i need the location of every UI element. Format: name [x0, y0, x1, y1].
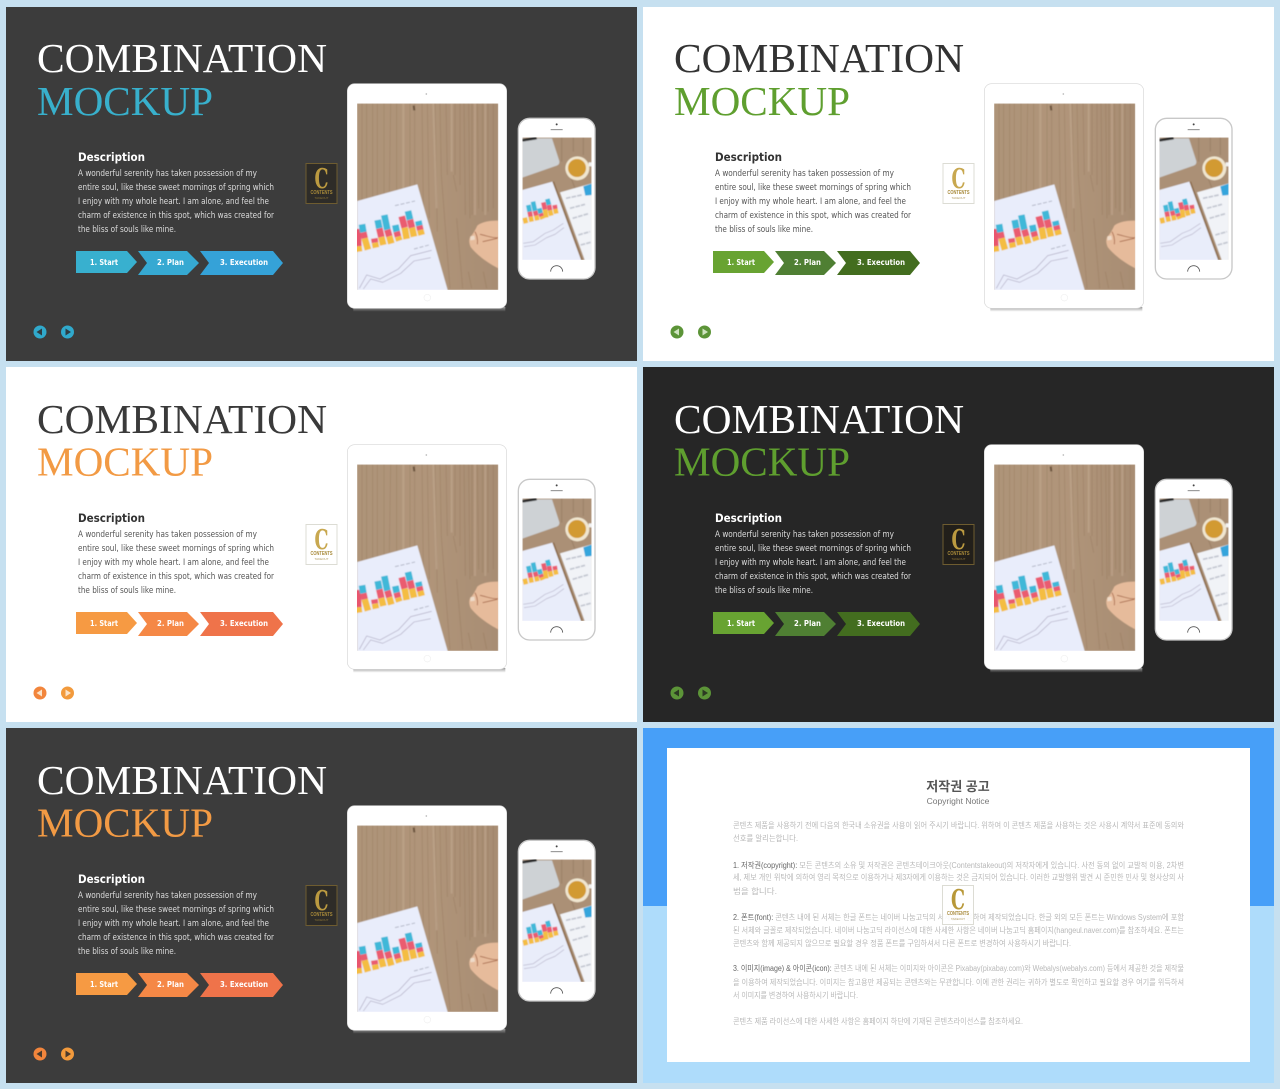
phone mockup: [1155, 479, 1232, 640]
logo badge: C: [952, 525, 966, 556]
notice body text: 2. 폰트(font): 콘텐츠 내에 된 서체는 한글 폰트는 네이버 나눔고딕의 서체를 사용하여 제작되었습니다. 한글 외의 모든 폰트는 Windows System에 포함: [733, 912, 1185, 922]
logo badge: [943, 164, 974, 204]
notice body text: 서 이미지를 변경하여 사용하시기 바랍니다.: [733, 990, 858, 1000]
tablet mockup: [984, 445, 1144, 673]
description text: [78, 511, 274, 596]
description text: Description: [78, 511, 145, 525]
title: MOCKUP: [37, 800, 213, 846]
logo badge: CONTENTS: [948, 551, 970, 557]
description text: charm of existence in this spot, which was created for: [715, 211, 911, 221]
description text: I enjoy with my whole heart. I am alone, and feel the: [715, 197, 906, 207]
process arrows: 1. Start: [727, 258, 755, 267]
notice heading: 저작권 공고: [926, 779, 990, 794]
notice body text: 세, 제보 개인 위탁에 의하여 영리 목적으로 이용하거나 제3자에게 이용하는 것은 금지되어 있습니다. 이러한 교발행위 발견 시 준민한 민사 및 형사상의 사: [733, 872, 1185, 882]
process arrows: 1. Start: [90, 980, 118, 989]
title: MOCKUP: [674, 78, 850, 124]
description text: A wonderful serenity has taken possession of my: [78, 530, 257, 540]
description text: the bliss of souls like mine.: [78, 947, 176, 957]
description text: Description: [715, 150, 782, 164]
logo badge: C: [952, 164, 966, 195]
description text: I enjoy with my whole heart. I am alone, and feel the: [715, 558, 906, 568]
phone mockup: [1155, 118, 1232, 279]
panel: white slide with orange accent: [6, 367, 637, 722]
process arrows: 3. Execution: [857, 619, 905, 628]
process arrows: 2. Plan: [794, 258, 821, 267]
description text: A wonderful serenity has taken possession of my: [715, 169, 894, 179]
panel: white slide with green accent: [643, 7, 1274, 361]
description text: the bliss of souls like mine.: [715, 225, 813, 235]
tablet mockup: [347, 84, 507, 312]
title: [37, 757, 327, 846]
notice body text: 콘텐츠와 함께 제공되지 않으므로 필요할 경우 정품 폰트를 구입하셔서 다른 폰트로 변경하여 사용하시기 바랍니다.: [733, 938, 1071, 948]
description text: entire soul, like these sweet mornings of spring which: [78, 183, 274, 193]
phone mockup: [518, 479, 595, 640]
description text: A wonderful serenity has taken possession of my: [78, 169, 257, 179]
panel: dark slide with blue accent: [6, 7, 637, 361]
description text: entire soul, like these sweet mornings of spring which: [78, 905, 274, 915]
title: COMBINATION: [37, 396, 327, 442]
process arrows: [76, 251, 283, 275]
process arrows: [713, 612, 920, 636]
logo badge: C: [951, 885, 965, 916]
title: [37, 396, 327, 484]
logo badge: C: [314, 886, 328, 917]
description text: entire soul, like these sweet mornings of spring which: [78, 544, 274, 554]
panel: copyright notice: [643, 728, 1274, 1083]
logo badge: CONTENTS: [948, 190, 970, 196]
logo badge: [942, 885, 974, 924]
description text: Description: [715, 511, 782, 525]
navigation buttons: [34, 326, 74, 338]
logo badge: [306, 164, 337, 204]
description text: the bliss of souls like mine.: [78, 225, 176, 235]
notice body text: 3. 이미지(image) & 아이콘(icon): 콘텐츠 내에 된 서체는 이미지와 아이콘은 Pixabay(pixabay.com)와 Webalys(webalys.com) 등에서 제공한 것을 제작물: [733, 963, 1184, 973]
title: MOCKUP: [37, 438, 213, 484]
notice body text: 법을 합니다.: [733, 886, 777, 896]
process arrows: 2. Plan: [157, 258, 184, 267]
description text: [78, 872, 274, 957]
description text: A wonderful serenity has taken possession of my: [715, 530, 894, 540]
notice heading: [926, 779, 990, 806]
process arrows: 3. Execution: [220, 980, 268, 989]
process arrows: 1. Start: [90, 619, 118, 628]
navigation buttons: [34, 1048, 74, 1060]
description text: charm of existence in this spot, which was created for: [78, 933, 274, 943]
logo badge: TAKEOUT: [951, 917, 965, 921]
logo badge: C: [314, 164, 328, 195]
description text: I enjoy with my whole heart. I am alone, and feel the: [78, 919, 269, 929]
notice body text: 1. 저작권(copyright): 모든 콘텐츠의 소유 및 저작권은 콘텐츠테이크아웃(Contentstakeout)의 저작자에게 있습니다. 사전 동의 없이 교발적 이용, 2차변: [733, 860, 1184, 870]
description text: I enjoy with my whole heart. I am alone, and feel the: [78, 197, 269, 207]
logo badge: TAKEOUT: [952, 196, 966, 200]
process arrows: [76, 973, 283, 997]
notice body text: 을 이용하여 제작되었습니다. 이미지는 참고용만 제공되는 콘텐츠와는 무관합니다. 이에 관한 권리는 귀하가 별도로 확인하고 필요할 경우 여기를 위득하셔: [733, 977, 1184, 987]
navigation buttons: [670, 686, 711, 700]
panel: black slide with green accent: [643, 367, 1274, 722]
logo badge: TAKEOUT: [952, 557, 966, 561]
title: [674, 35, 964, 124]
title: MOCKUP: [37, 78, 213, 124]
title: COMBINATION: [674, 35, 964, 81]
description text: charm of existence in this spot, which was created for: [78, 211, 274, 221]
process arrows: 3. Execution: [220, 619, 268, 628]
process arrows: 3. Execution: [857, 258, 905, 267]
logo badge: TAKEOUT: [315, 196, 329, 200]
phone mockup: [518, 118, 595, 279]
panel: dark slide with orange accent: [6, 728, 637, 1083]
tablet mockup: [347, 806, 507, 1034]
process arrows: 1. Start: [90, 258, 118, 267]
logo badge: CONTENTS: [310, 190, 333, 196]
logo badge: CONTENTS: [310, 912, 333, 918]
description text: entire soul, like these sweet mornings of spring which: [715, 183, 911, 193]
process arrows: 2. Plan: [157, 619, 184, 628]
description text: A wonderful serenity has taken possession of my: [78, 891, 257, 901]
description text: entire soul, like these sweet mornings of spring which: [715, 544, 911, 554]
logo badge: [943, 524, 974, 564]
title: [37, 35, 327, 124]
navigation buttons: [670, 326, 711, 338]
tablet mockup: [347, 445, 507, 673]
logo badge: [306, 886, 337, 926]
description text: the bliss of souls like mine.: [715, 586, 813, 596]
description text: [715, 511, 911, 596]
logo badge: CONTENTS: [947, 911, 970, 917]
navigation buttons: [34, 686, 74, 700]
description text: I enjoy with my whole heart. I am alone, and feel the: [78, 558, 269, 568]
process arrows: 1. Start: [727, 619, 755, 628]
notice heading: Copyright Notice: [927, 796, 990, 806]
description text: [715, 150, 911, 235]
notice body text: 선호를 알리는합니다.: [733, 833, 798, 843]
notice body text: 콘텐츠 제품을 사용하기 전에 다음의 한국내 소유권을 사용이 읽어 주시기 바랍니다. 위하여 이 콘텐츠 제품을 사용하는 것은 사용시 계약서 표준에 동의와: [733, 820, 1185, 830]
title: COMBINATION: [37, 757, 327, 803]
process arrows: 3. Execution: [220, 258, 268, 267]
logo badge: CONTENTS: [310, 551, 333, 557]
description text: [78, 150, 274, 235]
tablet mockup: [984, 84, 1144, 312]
notice body text: [733, 820, 1185, 1026]
description text: charm of existence in this spot, which was created for: [715, 572, 911, 582]
description text: charm of existence in this spot, which was created for: [78, 572, 274, 582]
process arrows: [76, 612, 283, 636]
logo badge: TAKEOUT: [315, 918, 329, 922]
description text: the bliss of souls like mine.: [78, 586, 176, 596]
title: COMBINATION: [37, 35, 327, 81]
process arrows: 2. Plan: [794, 619, 821, 628]
notice body text: 된 서체와 글꼴로 제작되었습니다. 네이버 나눔고딕 라이선스에 대한 사세한 사항은 네이버 나눔고딕 홈페이지(hangeul.naver.com)를 참조하세요. 폰트는: [733, 925, 1184, 935]
phone mockup: [518, 840, 595, 1001]
logo badge: C: [314, 525, 328, 556]
logo badge: [306, 524, 337, 564]
process arrows: [713, 251, 920, 275]
description text: Description: [78, 872, 145, 886]
description text: Description: [78, 150, 145, 164]
title: [674, 396, 964, 484]
logo badge: TAKEOUT: [315, 557, 329, 561]
process arrows: 2. Plan: [157, 980, 184, 989]
title: COMBINATION: [674, 396, 964, 442]
title: MOCKUP: [674, 438, 850, 484]
notice body text: 콘텐츠 제품 라이선스에 대한 사세한 사항은 홈페이지 하단에 기재된 콘텐츠라이선스를 참조하세요.: [733, 1016, 1023, 1026]
